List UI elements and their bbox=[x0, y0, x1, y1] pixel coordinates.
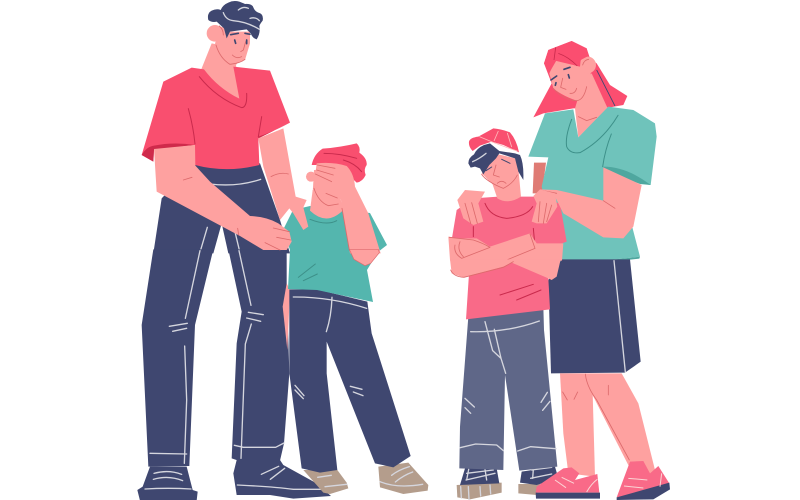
boy neck bbox=[310, 190, 343, 219]
boy hair bbox=[312, 143, 367, 183]
mother shirt bbox=[528, 107, 657, 265]
father: trousers and shoes bbox=[137, 163, 331, 500]
mother fringe bbox=[544, 41, 588, 73]
mother hand right bbox=[532, 189, 557, 223]
boy shoes bbox=[303, 470, 348, 494]
mother eyes and brows bbox=[551, 67, 570, 85]
mother legs bbox=[560, 373, 595, 477]
mother legs and shoes bbox=[536, 373, 670, 500]
mother arm bbox=[540, 167, 642, 238]
son arms lower edge bbox=[450, 259, 561, 280]
mother left shoe bbox=[536, 467, 599, 493]
son neck bbox=[492, 168, 521, 201]
boy in teal shirt: trousers and shoes bbox=[283, 283, 428, 494]
mother right shoe bbox=[617, 461, 669, 497]
father arm right bbox=[258, 128, 308, 230]
father: head bbox=[207, 1, 263, 65]
boy trousers bbox=[289, 289, 411, 473]
mother hand left bbox=[457, 190, 485, 225]
father arm left bbox=[154, 145, 292, 250]
son jeans bbox=[459, 307, 557, 471]
father left shoe bbox=[137, 467, 198, 500]
boy in teal shirt: head and arm bbox=[306, 143, 381, 253]
son in pink shirt: jeans and shoes bbox=[457, 259, 558, 499]
father neck bbox=[198, 43, 247, 105]
boy raised arm bbox=[315, 163, 381, 253]
mother back hair bbox=[533, 41, 627, 117]
father trousers upper bbox=[153, 163, 290, 253]
son tee lower bbox=[466, 259, 553, 319]
boy raised elbow bbox=[349, 249, 379, 266]
boy face bbox=[313, 170, 347, 206]
father eyes and brows bbox=[231, 33, 250, 44]
father face lines bbox=[216, 26, 246, 64]
son shoes bbox=[457, 483, 502, 499]
father shirt bbox=[142, 67, 290, 169]
mother ear bbox=[579, 57, 596, 73]
shirt details bbox=[298, 264, 317, 281]
father hair bbox=[208, 1, 263, 39]
mother: arm and hands on son bbox=[457, 167, 642, 238]
son crossed arms bbox=[448, 233, 563, 261]
son hair bbox=[468, 143, 523, 180]
mother back arm bbox=[533, 163, 546, 193]
son in pink shirt: upper body bbox=[448, 197, 567, 263]
boy in teal shirt: shirt bbox=[283, 206, 387, 302]
father right shoe bbox=[233, 460, 331, 499]
father trousers lower and shoes bbox=[137, 249, 331, 500]
father face bbox=[215, 27, 250, 65]
son neck and head bbox=[468, 128, 523, 201]
mother face bbox=[549, 61, 592, 102]
mother skirt bbox=[548, 259, 641, 373]
son face bbox=[482, 154, 519, 188]
mother neck bbox=[575, 73, 608, 137]
mother: hair, skirt and shirt bbox=[528, 41, 657, 267]
father ear bbox=[207, 25, 223, 42]
father: upper body bbox=[142, 43, 308, 250]
son cap bbox=[469, 128, 519, 152]
son tee bbox=[450, 197, 567, 263]
skin sliver behind boy bbox=[283, 283, 290, 350]
